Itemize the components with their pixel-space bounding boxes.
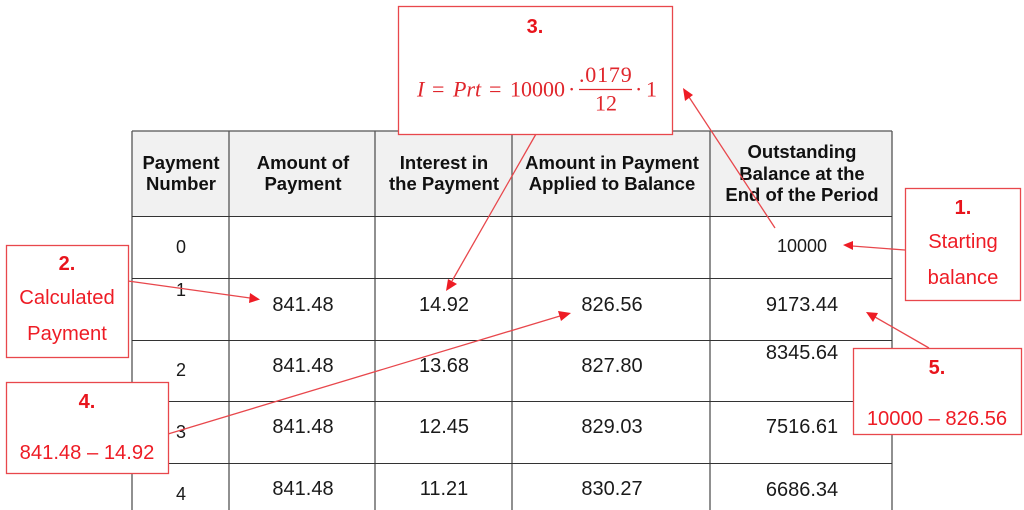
row 3: 3 xyxy=(176,422,186,442)
row 4: 4 xyxy=(176,484,186,504)
header: interest in the payment: Interest in xyxy=(400,152,488,173)
callout 3: interest formula: 3. xyxy=(527,16,543,38)
arrow: subtraction to 826.56 xyxy=(168,311,571,434)
callout 1: starting balance: 1. xyxy=(955,197,971,219)
arrow: new balance to 9173.44 xyxy=(866,312,929,348)
row 3: 829.03 xyxy=(581,416,643,438)
amortization table xyxy=(132,131,892,510)
formula: 12 xyxy=(595,90,617,116)
callout 4: subtraction for principal xyxy=(6,382,168,474)
row 4: 841.48 xyxy=(272,478,334,500)
row 2: 13.68 xyxy=(419,355,469,377)
row 1: 14.92 xyxy=(419,294,469,316)
row 3: 841.48 xyxy=(272,416,334,438)
formula: Prt xyxy=(452,76,482,102)
formula: · xyxy=(568,76,575,102)
formula xyxy=(416,62,657,116)
row 3 xyxy=(176,416,838,442)
callout 4: subtraction for principal: 841.48 – 14.92 xyxy=(20,442,154,464)
formula: I xyxy=(416,76,426,102)
callout 1: starting balance xyxy=(906,188,1020,300)
row 1 xyxy=(176,280,838,316)
arrow: starting balance to 10000 xyxy=(843,241,905,250)
formula: · xyxy=(635,76,642,102)
header: outstanding balance: Balance at the xyxy=(739,163,865,184)
header: payment number: Number xyxy=(146,173,216,194)
row 2: 841.48 xyxy=(272,355,334,377)
table header background xyxy=(132,131,892,216)
row 2: 827.80 xyxy=(581,355,643,377)
row 1: 9173.44 xyxy=(766,294,838,316)
callout 5: new balance subtraction xyxy=(854,348,1022,434)
header: interest in the payment: the Payment xyxy=(389,173,499,194)
row 2: 2 xyxy=(176,360,186,380)
callout 3: interest formula xyxy=(398,6,672,134)
row 4: 6686.34 xyxy=(766,479,838,501)
formula: = xyxy=(432,76,444,102)
callout 2: calculated payment xyxy=(6,246,128,358)
header: outstanding balance: Outstanding xyxy=(748,141,856,162)
formula: 10000 xyxy=(510,76,565,102)
header: amount of payment: Amount of xyxy=(257,152,350,173)
row 2: 8345.64 xyxy=(766,342,838,364)
callout 5: new balance subtraction: 5. xyxy=(929,357,945,379)
row 3: 7516.61 xyxy=(766,416,838,438)
callout 4: subtraction for principal: 4. xyxy=(79,391,95,413)
formula: = xyxy=(489,76,501,102)
callout 2: calculated payment: 2. xyxy=(59,253,75,275)
row 4 xyxy=(176,478,838,504)
row 1: 841.48 xyxy=(272,294,334,316)
row 1: 826.56 xyxy=(581,294,643,316)
callout 5: new balance subtraction: 10000 – 826.56 xyxy=(867,408,1007,430)
row 0: 0 xyxy=(176,237,186,257)
callout 1: starting balance: balance xyxy=(928,267,998,289)
row 4: 830.27 xyxy=(581,478,643,500)
row 4: 11.21 xyxy=(420,478,468,500)
header: amount applied to balance: Applied to Balance xyxy=(529,173,695,194)
row 1: 1 xyxy=(176,280,186,300)
formula: .0179 xyxy=(579,62,632,87)
row 2 xyxy=(176,342,838,380)
arrow: starting balance to formula xyxy=(683,88,775,228)
header: outstanding balance: End of the Period xyxy=(725,184,879,205)
header: amount of payment: Payment xyxy=(264,173,342,194)
callout 2: calculated payment: Calculated xyxy=(19,287,115,309)
row 3: 12.45 xyxy=(419,416,469,438)
arrow: calculated payment to 841.48 xyxy=(128,281,260,303)
callout 2: calculated payment: Payment xyxy=(27,323,107,345)
arrow: interest formula to 14.92 xyxy=(446,134,536,291)
row 0: 10000 xyxy=(777,236,827,256)
header: amount applied to balance: Amount in Payment xyxy=(525,152,699,173)
header: payment number: Payment xyxy=(142,152,220,173)
row 0 xyxy=(176,236,827,257)
formula: 1 xyxy=(646,76,657,102)
callout 1: starting balance: Starting xyxy=(928,231,998,253)
